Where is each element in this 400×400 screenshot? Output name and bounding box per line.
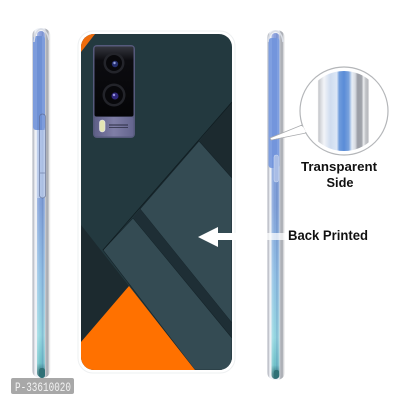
diagonal line — [103, 102, 232, 250]
label: back printed: Back Printed — [288, 228, 368, 243]
pointer — [270, 125, 306, 140]
arrow — [198, 227, 287, 247]
watermark product code: P-33610020 — [15, 380, 71, 395]
lower lens — [102, 84, 126, 106]
magnifier callout — [270, 67, 388, 155]
orange corner top — [81, 34, 95, 52]
label: transparent side: Side — [326, 175, 354, 190]
phone case back print — [78, 31, 235, 373]
label: transparent side: Transparent — [301, 159, 378, 174]
dark stripe — [133, 209, 232, 338]
upper lens — [104, 52, 124, 74]
watermark product code — [11, 378, 74, 395]
left dark triangle — [81, 225, 129, 342]
right side phone — [267, 30, 285, 380]
label: transparent side — [301, 159, 378, 190]
lower light panel — [103, 218, 232, 370]
orange triangle — [81, 286, 195, 370]
camera label lines — [109, 125, 128, 128]
flash — [100, 120, 105, 132]
left side phone — [32, 28, 50, 378]
right dark triangle — [199, 102, 232, 178]
camera module — [93, 45, 135, 138]
upper-right light panel — [140, 141, 232, 323]
